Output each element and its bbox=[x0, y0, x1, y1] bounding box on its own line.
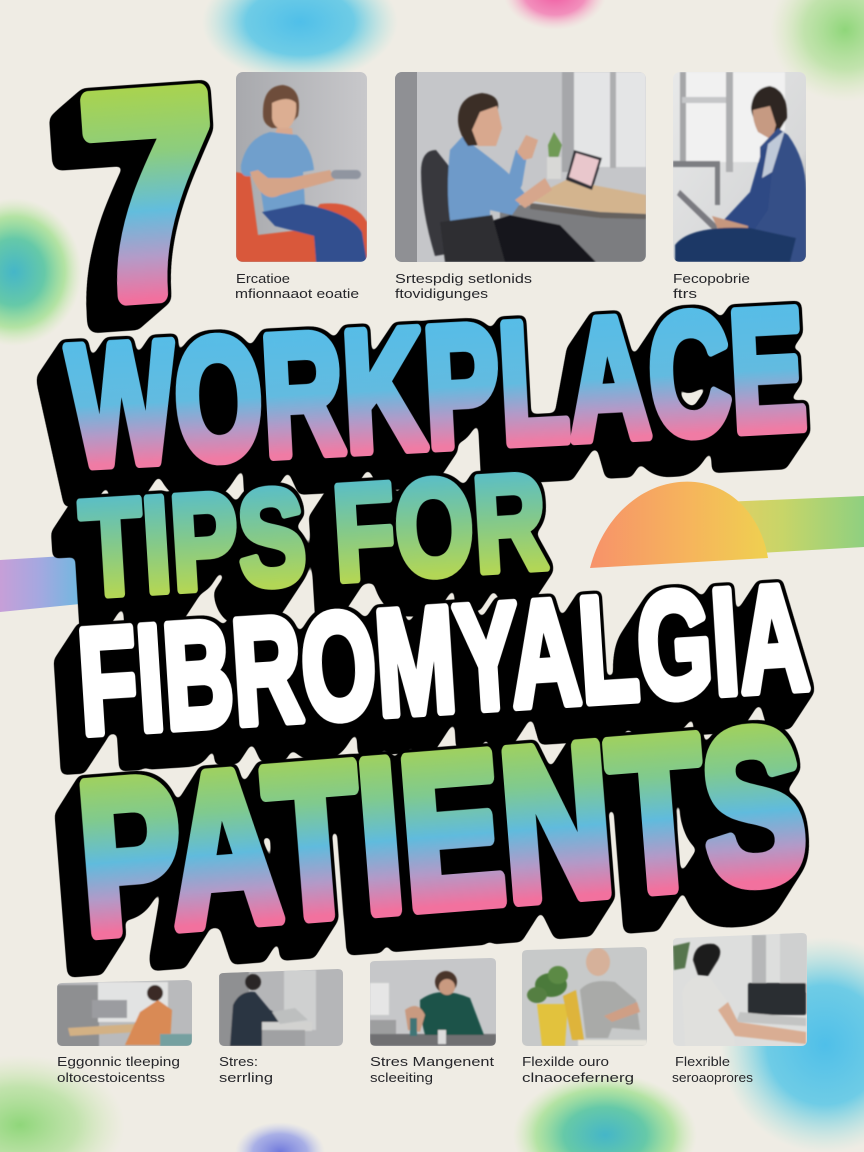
caption: bottom photo 3 bbox=[370, 1054, 494, 1085]
caption: photo 3: Fecopobrie bbox=[673, 271, 750, 286]
photo: man in dark sweater at table bbox=[219, 968, 343, 1048]
photo: man in green shirt at table bbox=[370, 956, 496, 1048]
caption: bottom photo 4: clnaocefernerg bbox=[522, 1070, 634, 1085]
sun semicircle shape bbox=[590, 482, 768, 568]
heading: TIPS FOR: TIPS FOR bbox=[76, 445, 551, 625]
caption: bottom photo 1: oltocestoicentss bbox=[57, 1070, 166, 1085]
caption: bottom photo 4 bbox=[522, 1054, 634, 1085]
caption: bottom photo 5 bbox=[672, 1054, 754, 1085]
caption: bottom photo 2 bbox=[219, 1054, 273, 1085]
caption: bottom photo 5: seroaoprores bbox=[672, 1070, 754, 1085]
right gradient band bbox=[700, 496, 864, 555]
caption: bottom photo 2: Stres: bbox=[219, 1054, 258, 1069]
caption: bottom photo 3: Stres Mangenent bbox=[370, 1054, 494, 1069]
caption: bottom photo 4: Flexilde ouro bbox=[522, 1054, 609, 1069]
caption: photo 2: ftovidigunges bbox=[395, 286, 489, 301]
caption: bottom photo 1 bbox=[57, 1054, 180, 1085]
caption: photo 1 bbox=[235, 271, 359, 301]
photo: older man with yellow planter bbox=[522, 945, 647, 1049]
caption: photo 2: Srtespdig setlonids bbox=[395, 271, 533, 286]
caption: bottom photo 1: Eggonnic tleeping bbox=[57, 1054, 180, 1069]
heading numeral 7: 7 bbox=[74, 30, 228, 359]
caption: bottom photo 3: scleeiting bbox=[370, 1070, 433, 1085]
caption: photo 3 bbox=[673, 271, 750, 301]
caption: bottom photo 2: serrling bbox=[219, 1070, 273, 1085]
photo: woman on red chair bbox=[236, 72, 367, 262]
photo: man at desk with laptop bbox=[395, 72, 646, 262]
caption: photo 1: mfionnaaot eoatie bbox=[235, 286, 359, 301]
caption: bottom photo 5: Flexrible bbox=[675, 1054, 730, 1069]
caption: photo 2 bbox=[395, 271, 533, 301]
caption: photo 1: Ercatioe bbox=[236, 271, 290, 286]
photo: ergonomic desk, orange sweater bbox=[57, 978, 192, 1048]
left gradient band bbox=[0, 555, 80, 612]
caption: photo 3: ftrs bbox=[673, 286, 698, 301]
photo: man in blue suit with tablet bbox=[673, 72, 806, 262]
photo: man in white T-shirt at laptop bbox=[673, 932, 807, 1048]
